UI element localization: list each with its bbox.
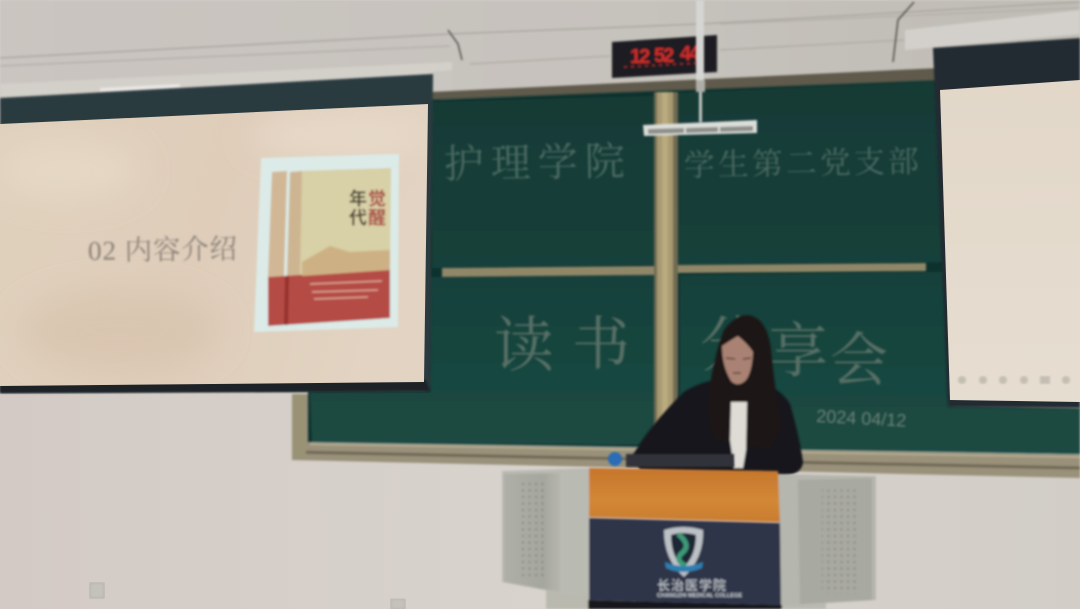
chalk heading: nursing school party branch: 学生第二党支部 <box>684 144 922 183</box>
blackboard panels <box>308 80 1080 454</box>
slide toolbar icons <box>958 376 1070 384</box>
wall above the board <box>0 0 1080 110</box>
eyes and mouth <box>726 358 751 373</box>
digital wall clock: 12 <box>630 46 650 68</box>
slide book image <box>254 154 399 332</box>
right speaker wing <box>778 474 876 606</box>
digital wall clock: 44 <box>680 43 701 65</box>
chalk title: reading share meeting: 享 <box>768 319 828 385</box>
lectern <box>502 468 876 609</box>
left projector roller housing <box>0 30 462 97</box>
chalk title: reading share meeting: 书 <box>572 312 630 377</box>
hair <box>708 315 782 450</box>
wall socket lower left <box>90 583 104 598</box>
jacket <box>633 380 803 476</box>
chalk title: reading share meeting <box>494 312 888 393</box>
chalk date: 2024 04/12 <box>816 406 907 431</box>
right projection screen <box>933 38 1080 408</box>
blackboard frame <box>292 68 1080 478</box>
left speaker wing <box>502 468 590 596</box>
slide book image: 年 <box>349 188 367 209</box>
digital wall clock <box>612 35 717 78</box>
ceiling projector pole and light <box>643 0 757 136</box>
chalk title: reading share meeting: 会 <box>830 328 888 393</box>
chalk heading: nursing school party branch: 护理学院 <box>443 139 632 187</box>
right projector roller housing <box>893 2 1080 62</box>
chalk title: reading share meeting: 读 <box>494 313 554 379</box>
board dividers <box>442 92 926 450</box>
slide texture patches <box>38 106 380 356</box>
wooden top <box>589 468 780 522</box>
chalk title: reading share meeting: 分 <box>700 313 760 379</box>
college name <box>657 578 742 599</box>
college shield logo <box>664 527 703 577</box>
presenter <box>633 315 803 476</box>
slide book image: 代 <box>349 208 367 228</box>
slide heading: 02 内容介绍 <box>88 233 238 266</box>
face <box>722 336 753 384</box>
slide book image: 觉 <box>368 189 386 209</box>
wall socket bottom <box>391 599 405 609</box>
navy front panel <box>589 518 781 605</box>
shirt <box>730 402 747 468</box>
left projection screen <box>0 74 433 393</box>
chalk heading: nursing school party branch <box>443 139 922 187</box>
wall below the board <box>0 385 1080 609</box>
lectern base <box>546 590 826 609</box>
college name: CHANGZHI MEDICAL COLLEGE <box>657 593 742 599</box>
slide book image: 醒 <box>368 208 386 228</box>
laptop and blue microphone on lectern <box>608 452 734 467</box>
college name: 长治医学院 <box>657 578 727 593</box>
digital wall clock: 52 <box>654 45 674 67</box>
